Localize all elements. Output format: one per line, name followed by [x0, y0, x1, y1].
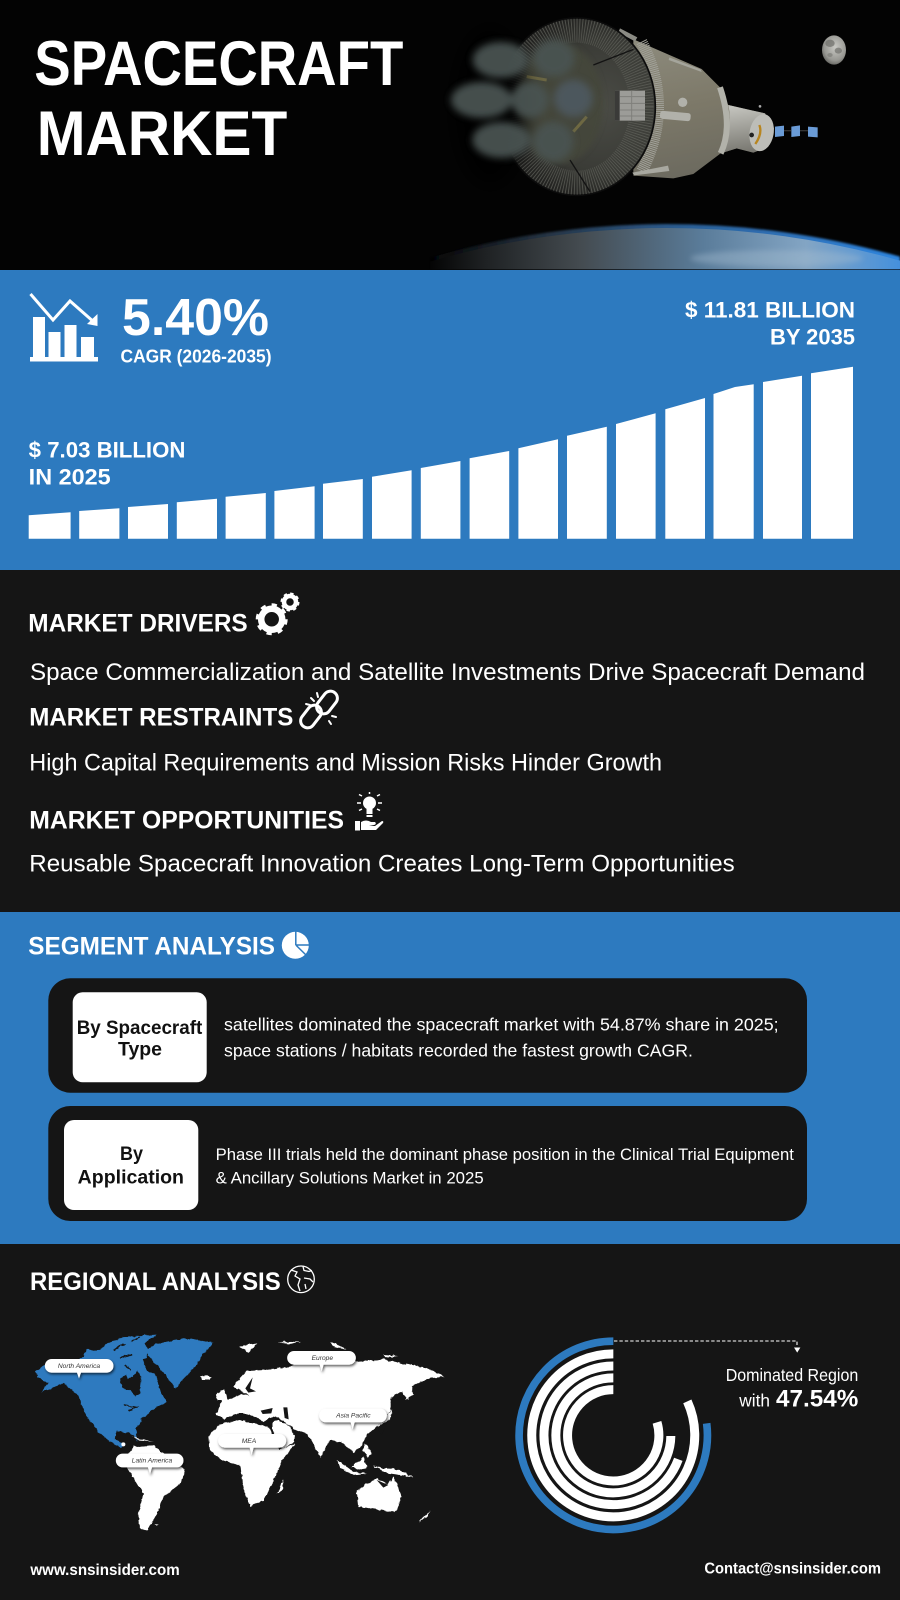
illustration: moon: [822, 35, 846, 65]
map: inland seas: [245, 1377, 388, 1488]
CAGR label: CAGR (2026-2035): [120, 346, 272, 367]
card: by application: Phase III trials held the dominant phase position in the Clinical Trial Equipment: [216, 1146, 794, 1164]
panel: regional analysis: [0, 1244, 900, 1600]
card: by application: [48, 1106, 807, 1221]
heading: regional analysis: REGIONAL ANALYSIS: [30, 1268, 281, 1296]
2035 value: BY 2035: [770, 325, 855, 350]
heading: market opportunities: MARKET OPPORTUNITIES: [29, 807, 344, 835]
arrow: dashed leader to dominated region: [614, 1341, 799, 1352]
text: dominated region: with: [738, 1391, 770, 1411]
callout: Latin America: Latin America: [132, 1458, 173, 1465]
icon: Central America marker: [121, 1442, 125, 1446]
footer: website: www.snsinsider.com: [29, 1562, 180, 1579]
radial chart: regional share: [519, 1341, 707, 1529]
icon: light bulb in hand: [355, 792, 383, 830]
2025 value: $ 7.03 BILLION: [29, 438, 185, 463]
callout: North America: [45, 1359, 113, 1379]
CAGR value: 5.40%: [122, 289, 269, 347]
card: by spacecraft type: satellites dominated the spacecraft market with 54.87% share in 2025;: [224, 1015, 779, 1035]
callout: Europe: [287, 1351, 356, 1371]
text: dominated region: 47.54%: [776, 1386, 858, 1413]
panel: market size: [0, 270, 900, 570]
heading: segment analysis: SEGMENT ANALYSIS: [28, 932, 275, 960]
text: dominated region: [726, 1365, 858, 1413]
text: dominated region: Dominated Region: [726, 1365, 858, 1385]
callout: MEA: [218, 1434, 286, 1455]
text: restraint: High Capital Requirements and Mission Risks Hinder Growth: [29, 749, 662, 776]
title: [34, 29, 403, 169]
title: SPACECRAFT: [34, 29, 403, 99]
callout: MEA: MEA: [242, 1438, 257, 1445]
panel: market dynamics: [0, 570, 900, 912]
illustration: spacecraft: [455, 18, 818, 195]
callout: Asia Pacific: Asia Pacific: [335, 1413, 371, 1420]
illustration: Earth horizon: [430, 224, 900, 269]
card: by spacecraft type: [48, 978, 807, 1093]
hero background panel: [0, 0, 900, 270]
icon: gears: [257, 594, 298, 634]
card: by application: By: [120, 1143, 143, 1165]
heading: market drivers: MARKET DRIVERS: [28, 609, 248, 637]
card: by application: Application: [78, 1166, 184, 1188]
footer: contact: Contact@snsinsider.com: [704, 1560, 881, 1577]
hero illustration: spacecraft above Earth: [430, 18, 900, 269]
icon: broken chain: [298, 688, 340, 731]
heading: market restraints: MARKET RESTRAINTS: [29, 704, 293, 732]
card: by spacecraft type: space stations / habitats recorded the fastest growth CAGR.: [224, 1041, 693, 1061]
callout: Latin America: [116, 1454, 183, 1474]
icon: pie chart: [282, 932, 309, 959]
icon: globe: [288, 1266, 314, 1293]
callout: Europe: Europe: [312, 1355, 333, 1362]
icon: growth chart: [30, 294, 98, 362]
text: driver: Space Commercialization and Satellite Investments Drive Spacecraft Demand: [30, 659, 865, 686]
map: rest of world: [126, 1341, 445, 1531]
card: by spacecraft type: By Spacecraft: [77, 1017, 203, 1039]
card: by spacecraft type: Type: [118, 1038, 162, 1060]
2035 value: $ 11.81 BILLION: [685, 298, 855, 323]
card: by application: & Ancillary Solutions Market in 2025: [216, 1169, 484, 1187]
illustration: engine plumes: [451, 40, 593, 162]
2025 value: [29, 438, 185, 490]
title: MARKET: [37, 99, 287, 169]
2035 value: [685, 298, 855, 350]
world map: [36, 1335, 445, 1531]
map: North America: [36, 1335, 213, 1447]
callout: North America: North America: [58, 1363, 100, 1370]
text: opportunity: Reusable Spacecraft Innovation Creates Long-Term Opportunities: [29, 850, 735, 877]
callout: Asia Pacific: [319, 1409, 387, 1429]
bar chart: market growth: [29, 367, 853, 539]
2025 value: IN 2025: [29, 465, 111, 490]
panel: segment analysis: [0, 912, 900, 1244]
